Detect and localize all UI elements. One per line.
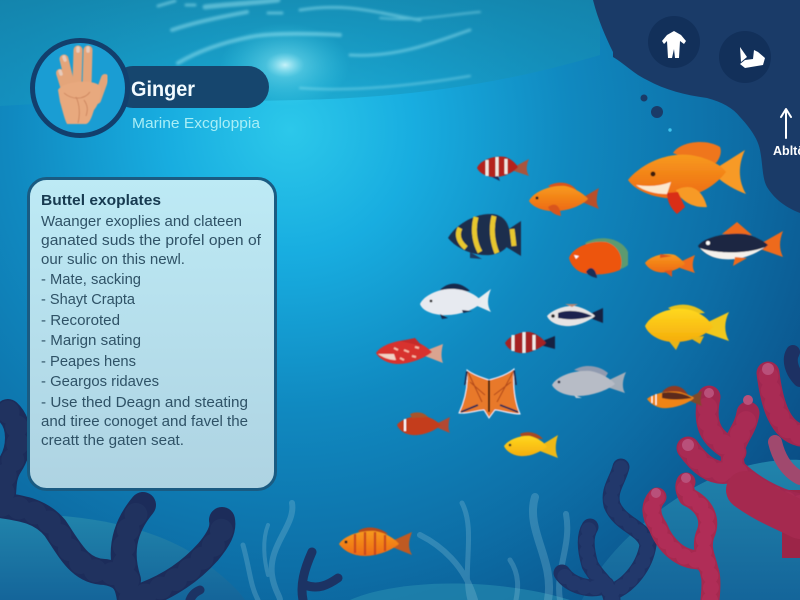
icon panel: top right blob [593,0,800,213]
panel body text: Waanger exoplies and clateen [41,214,242,230]
info panel [28,178,276,490]
fish: yellow and black striped [448,214,521,259]
arrow [781,109,791,138]
panel heading: Buttel exoplates [41,193,161,209]
fish: red spotted [376,338,443,364]
fish: navy and white [547,304,603,326]
panel body text: creatt the gaten seat. [41,433,184,449]
panel body text: and tiree conoget and favel the [41,414,248,430]
subtitle: Marine Excgloppia [132,115,261,132]
panel body text: - Geargos ridaves [41,374,159,390]
panel body text: ganated suds the profel open of [41,233,262,249]
fish: orange [529,183,599,216]
seaweed strands [243,497,567,600]
panel body text [41,214,262,449]
pink coral: large right [682,363,800,558]
seabed mounds [0,460,800,600]
icon button: figure [648,16,700,68]
dark coral: small bottom centre [190,552,338,600]
bubbles [640,94,672,132]
fish: big orange [628,142,746,214]
title: Ginger: Ginger [131,78,195,101]
panel body text: - Peapes hens [41,354,136,370]
avatar: hand in circle [32,40,128,136]
fish: small orange [645,254,695,277]
fish: large yellow [645,305,729,350]
fish: orange striped bottom [339,527,412,556]
pink coral: lower right [651,473,711,600]
panel body text: - Shayt Crapta [41,292,136,308]
dark coral: lower left [0,412,222,600]
fish: small yellow [504,432,558,458]
panel body text: - Mate, sacking [41,272,141,288]
fish: red-brown [397,412,450,435]
fish: small brown and orange [647,386,702,408]
fish: grey [552,366,626,398]
header pill [112,66,269,108]
fish: white [420,284,491,319]
fish: red and white striped small [505,332,555,353]
panel body text: our sulic on this newl. [41,252,185,268]
panel body text: - Use thed Deagn and steating [41,395,248,411]
butterfly [459,369,520,418]
fish: red-orange with teal fin [569,238,628,278]
panel body text: - Recoroted [41,313,120,329]
dark coral: lower right [562,352,800,600]
icon button: boat [719,31,771,83]
fish: black white and orange [698,222,783,266]
fish: red striped [477,157,529,181]
panel body text: - Marign sating [41,333,141,349]
